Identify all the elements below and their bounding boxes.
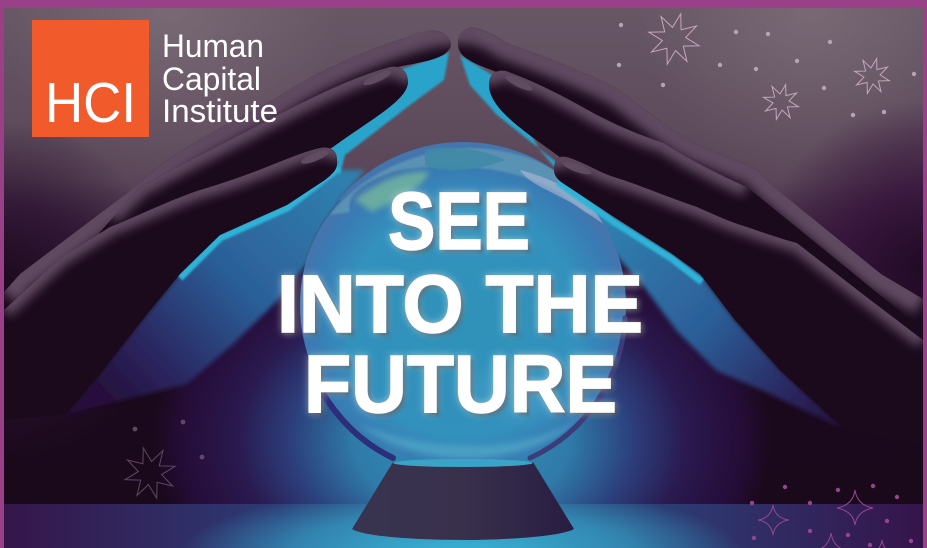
title: see into the future: INTO THE <box>277 259 643 350</box>
palm: right <box>560 185 845 430</box>
logo wordmark: Human Capital Institute <box>162 28 278 129</box>
title: see into the future: FUTURE <box>304 339 617 430</box>
table surface <box>0 504 927 548</box>
ring finger and arm: left <box>4 148 337 420</box>
stars: top right <box>649 14 889 119</box>
dots: bottom left <box>133 420 204 459</box>
cyan rim under lower finger: left <box>180 168 339 278</box>
palm: left <box>67 170 365 414</box>
fingernails: right <box>473 27 592 177</box>
crystal ball <box>300 142 626 468</box>
cyan backing between left fingertips <box>320 52 449 175</box>
logo: HCI <box>32 20 149 137</box>
title: see into the future <box>277 176 643 430</box>
index finger: left <box>4 30 451 304</box>
fingernails: left <box>300 29 427 166</box>
crystal ball base <box>352 459 574 540</box>
ring finger and arm: right <box>554 157 923 446</box>
middle finger: left <box>98 66 408 234</box>
star: bottom left <box>116 439 184 507</box>
sparkles: bottom right <box>758 490 886 548</box>
middle finger: right <box>489 70 901 312</box>
cyan backing between right fingertips <box>460 55 578 195</box>
right hand <box>458 27 923 446</box>
cyan rim under lower finger: right <box>558 182 702 282</box>
title: see into the future: SEE <box>388 176 530 267</box>
logo wordmark: Human Capital Institute: Capital <box>162 61 261 97</box>
logo: HCI: HCI <box>45 71 136 135</box>
dots: top right <box>617 23 916 117</box>
logo wordmark: Human Capital Institute: Institute <box>162 93 278 129</box>
logo wordmark: Human Capital Institute: Human <box>162 28 264 64</box>
dots: bottom right <box>750 484 913 547</box>
left hand <box>4 29 451 420</box>
index finger: right <box>458 28 923 350</box>
